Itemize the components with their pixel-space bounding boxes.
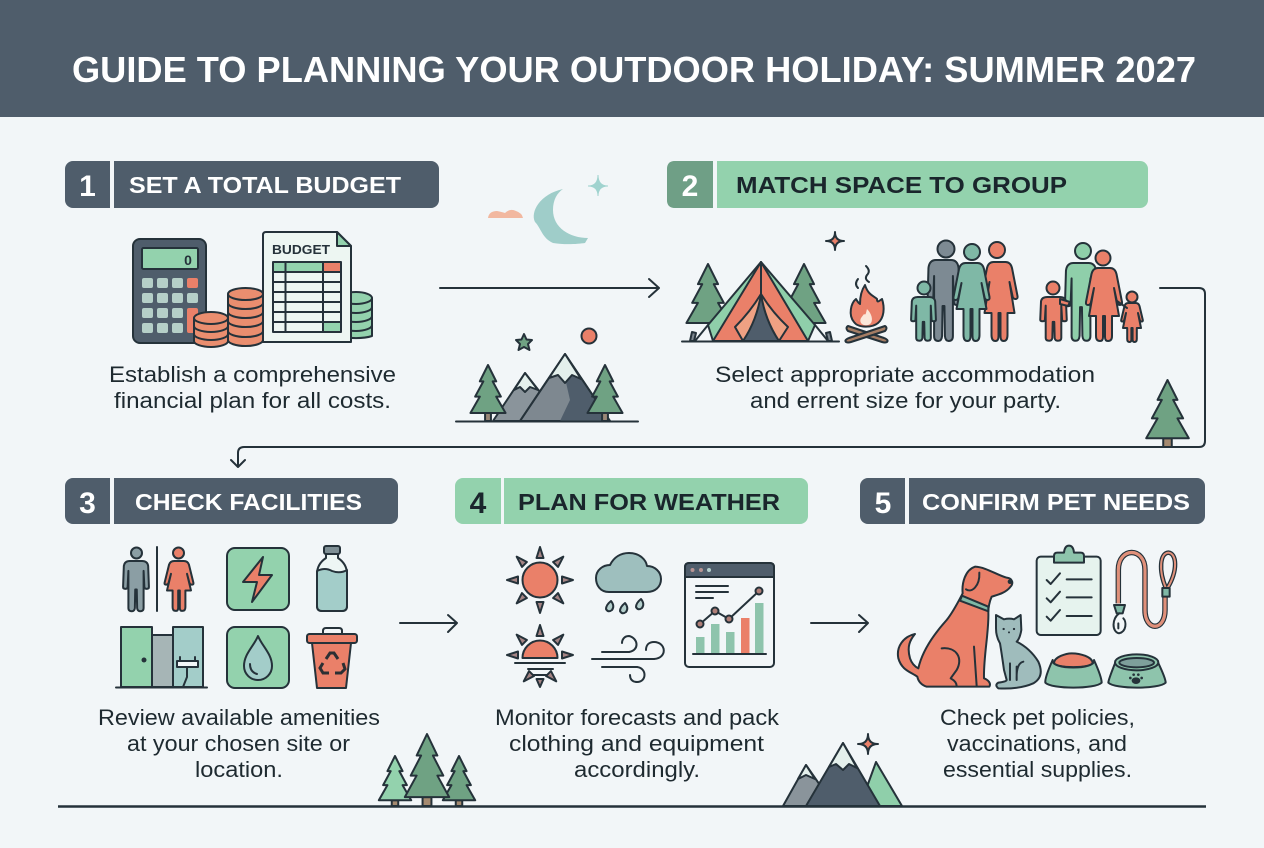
heading: step 2: MATCH SPACE TO GROUP	[736, 172, 1067, 198]
decoration: lone pine tree	[1146, 380, 1189, 447]
heading: step 2: 2	[682, 170, 698, 203]
decoration: moon, star and cloud	[488, 175, 608, 244]
icon: wind	[592, 636, 664, 682]
icon: budget sheet	[263, 232, 351, 342]
title banner	[0, 0, 1264, 117]
ground line	[58, 805, 1206, 808]
icon: sunrise	[507, 625, 573, 687]
heading: step 3: 3	[79, 487, 96, 520]
icon: cat	[996, 615, 1041, 688]
decoration: mountains with trees	[456, 328, 638, 422]
icon: water bottle	[317, 546, 347, 611]
icon: restroom signs	[123, 547, 193, 611]
arrow: step 3 to step 4	[400, 615, 457, 632]
text: step 4 description: accordingly.	[574, 757, 700, 782]
heading: step 5	[860, 478, 1205, 524]
icon: calculator: 0	[184, 252, 192, 268]
text: step 1 description: Establish a comprehensive	[109, 362, 396, 387]
heading: step 2	[667, 161, 1148, 208]
text: step 5 description	[940, 705, 1135, 782]
icon: recycling bin	[307, 628, 357, 688]
heading: step 1	[65, 161, 439, 208]
icon: leash	[1114, 552, 1175, 633]
text: step 3 description	[98, 705, 380, 782]
text: step 3 description: at your chosen site or	[127, 731, 350, 756]
icon: budget sheet: BUDGET	[272, 242, 330, 257]
title banner: GUIDE TO PLANNING YOUR OUTDOOR HOLIDAY: SUMMER 2027	[72, 49, 1196, 90]
heading: step 5: CONFIRM PET NEEDS	[922, 489, 1190, 515]
panel: step 5 confirm pet needs	[860, 478, 1205, 782]
icon: campfire	[845, 266, 888, 342]
icon: family of four	[911, 240, 1018, 341]
arrow: step 1 to step 2	[440, 279, 659, 297]
text: step 3 description: Review available amenities	[98, 705, 380, 730]
icon: water drop	[227, 627, 289, 688]
icon: sun	[507, 547, 573, 613]
text: step 2 description	[715, 362, 1095, 413]
text: step 5 description: Check pet policies,	[940, 705, 1135, 730]
arrow: step 4 to step 5	[811, 615, 868, 632]
heading: step 1: SET A TOTAL BUDGET	[129, 172, 401, 198]
icon: sparkle	[826, 232, 844, 250]
icon: checklist clipboard	[1037, 546, 1101, 635]
icon: calculator	[133, 239, 206, 343]
text: step 4 description	[495, 705, 780, 782]
heading: step 3: CHECK FACILITIES	[135, 489, 362, 515]
icon: food bowl	[1045, 653, 1102, 688]
heading: step 4	[455, 478, 808, 524]
heading: step 1: 1	[79, 170, 96, 203]
icon: family with children holding hands	[1040, 243, 1143, 342]
icon: water bowl with paw	[1108, 654, 1166, 688]
heading: step 4: 4	[470, 487, 487, 520]
icon: orange coin stacks	[194, 288, 263, 347]
heading: step 3	[65, 478, 398, 524]
text: step 5 description: essential supplies.	[943, 757, 1132, 782]
text: step 1 description: financial plan for all costs.	[114, 388, 391, 413]
arrow: connector from step 2 to step 3	[231, 288, 1205, 467]
text: step 3 description: location.	[195, 757, 283, 782]
heading: step 4: PLAN FOR WEATHER	[518, 489, 780, 515]
decoration: mountains and sparkle	[783, 734, 902, 806]
text: step 4 description: Monitor forecasts and pack	[495, 705, 780, 730]
icon: forecast chart window	[685, 563, 774, 667]
text: step 5 description: vaccinations, and	[947, 731, 1127, 756]
icon: dog	[898, 567, 1012, 687]
icon: power supply	[227, 548, 289, 610]
icon: tent with trees	[682, 262, 839, 342]
icon: rain cloud	[596, 553, 661, 613]
text: step 4 description: clothing and equipment	[509, 731, 764, 756]
panel: step 3 check facilities	[65, 478, 398, 782]
panel: step 4 plan for weather	[455, 478, 808, 782]
panel: step 1 set a total budget	[65, 161, 439, 413]
icon: green coin stack	[340, 292, 372, 338]
decoration: trio of trees	[379, 734, 475, 806]
text: step 2 description: Select appropriate accommodation	[715, 362, 1095, 387]
text: step 2 description: and errent size for your party.	[750, 388, 1061, 413]
icon: shower block	[116, 627, 207, 688]
heading: step 5: 5	[875, 487, 891, 520]
text: step 1 description	[109, 362, 396, 413]
panel: step 2 match space to group	[667, 161, 1148, 413]
